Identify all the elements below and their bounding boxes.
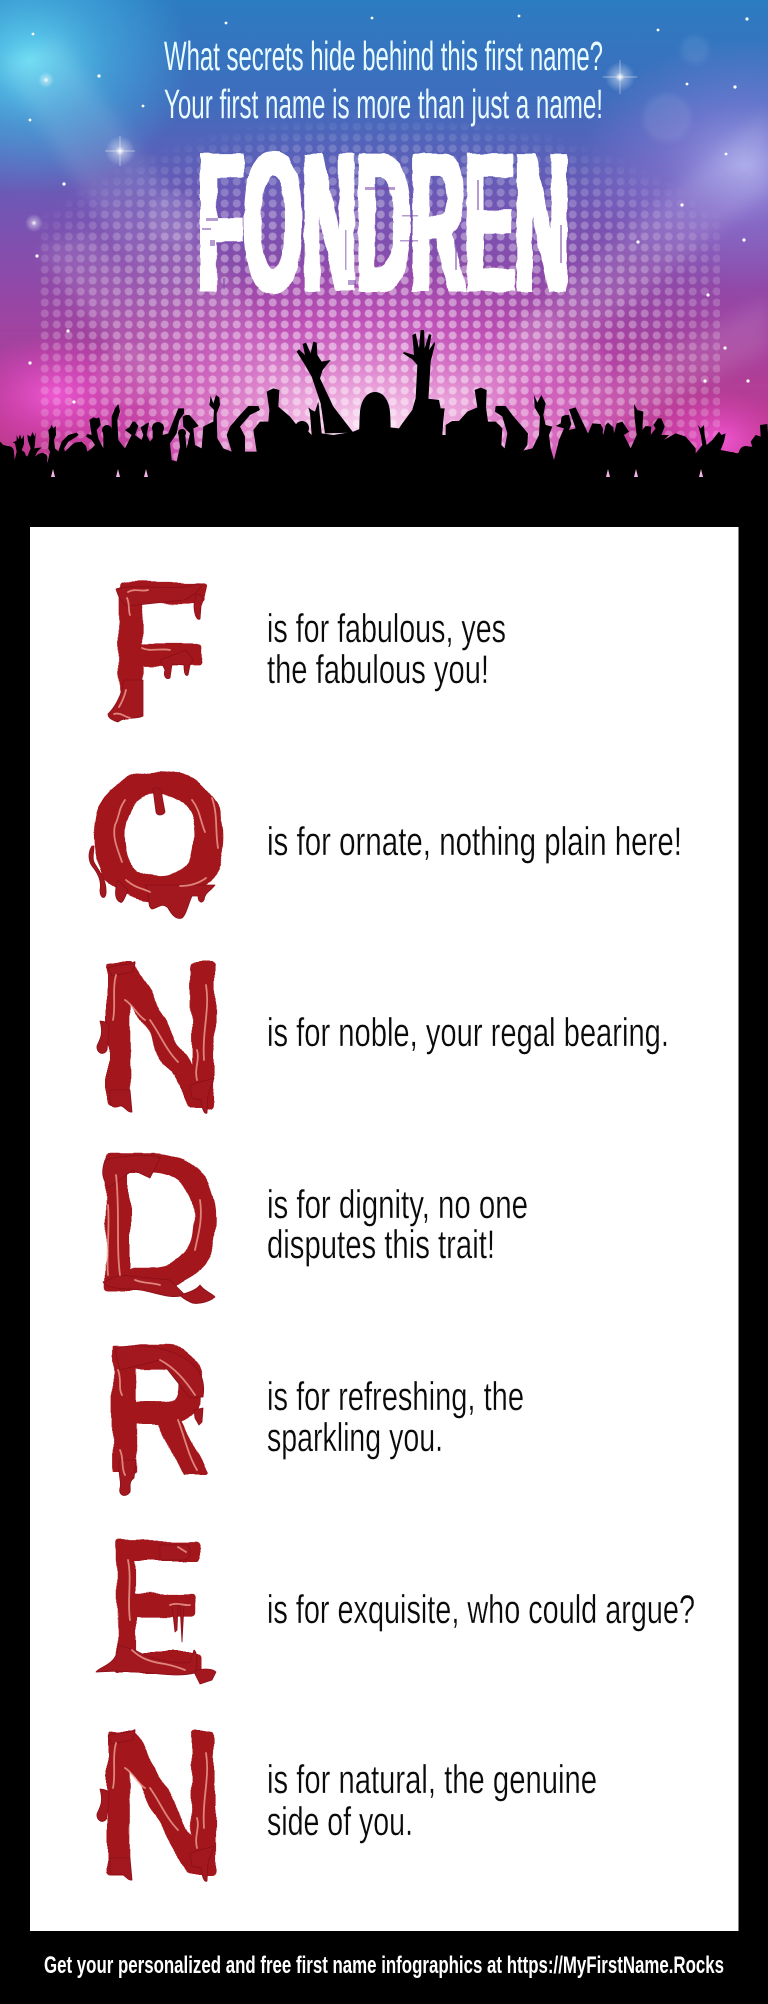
row: N [97,924,669,1144]
text: fabulous: is for fabulous, yes [267,607,506,651]
icon: blood letter E: E [107,1504,205,1709]
text: dignity: disputes this trait! [267,1223,495,1267]
row: F [108,545,506,754]
text: natural [267,1758,597,1844]
row: O [88,737,682,936]
text: fabulous [267,607,506,692]
name title [198,112,569,334]
text: dignity [267,1183,528,1267]
bokeh shapes [95,36,709,409]
raised right arm [399,330,435,433]
text: fabulous: the fabulous you! [267,648,489,692]
text: refreshing [267,1375,524,1460]
text: natural: side of you. [267,1800,413,1844]
ground slivers [51,469,703,477]
crowd heads [2,421,753,462]
hero glows [0,0,768,610]
intro text [164,33,603,127]
icon: blood letter D: D [95,1115,222,1327]
text: refreshing: sparkling you. [267,1416,443,1460]
icon: blood letter R: R [104,1307,210,1511]
row: N [97,1692,597,1912]
hero gradient backdrop [0,0,768,500]
crowd: right half [384,388,768,533]
LED dot grid [40,122,720,460]
hero panel: concert scene [0,0,768,477]
central figure head [358,392,392,436]
icon: blood letter O: O [88,737,230,936]
text: refreshing: is for refreshing, the [267,1375,524,1419]
stars and sparkles [25,15,750,404]
crowd: left half [0,388,384,533]
icon: blood letter N: N [97,924,225,1144]
text: dignity: is for dignity, no one [267,1183,528,1227]
row: E [96,1504,695,1709]
row: D [95,1115,528,1327]
title distress marks [202,180,562,289]
text: natural: is for natural, the genuine [267,1758,597,1802]
row: R [104,1307,524,1511]
icon: blood letter F: F [110,545,208,754]
raised left arm [297,342,353,433]
crowd silhouette [0,330,768,533]
panel: white card [30,527,738,1931]
icon: blood letter N: N [97,1692,225,1912]
